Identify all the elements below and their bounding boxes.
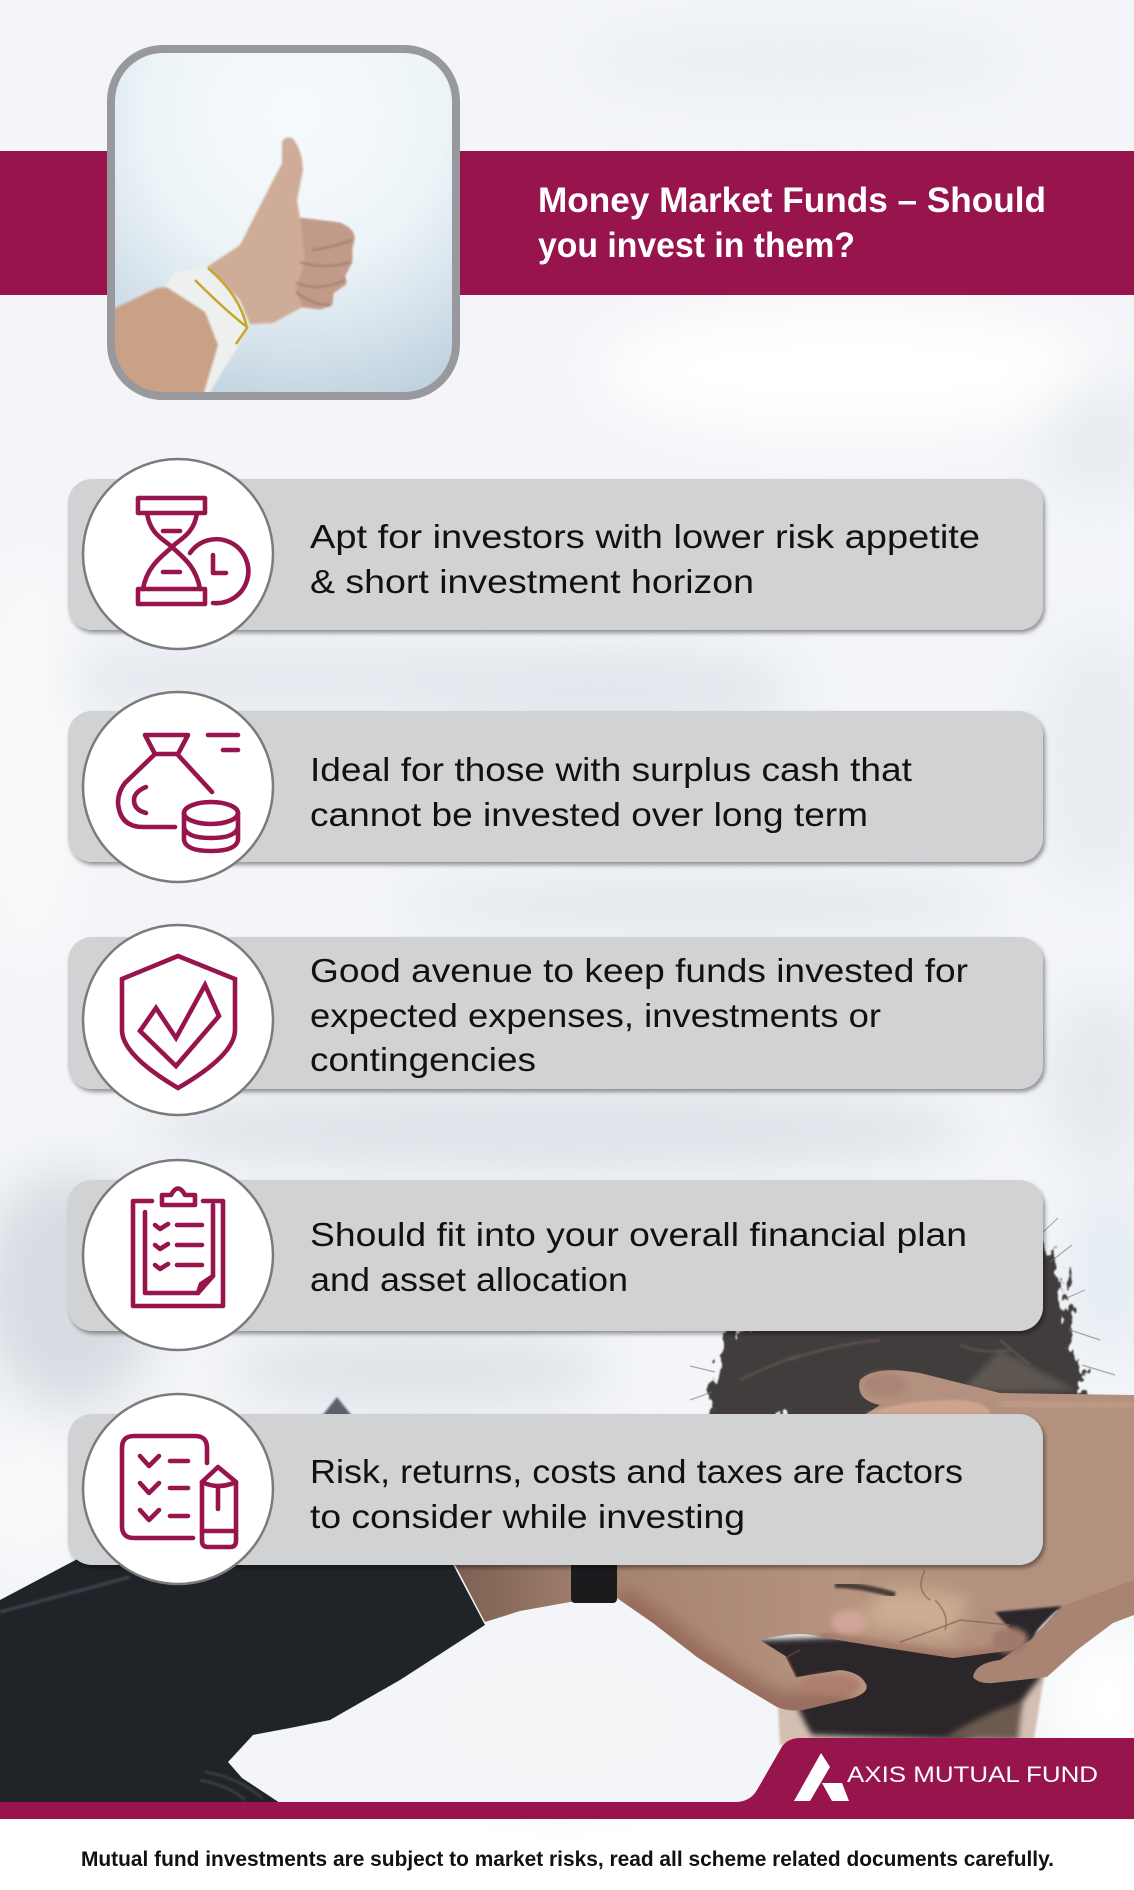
panel: item 5	[68, 1394, 1043, 1584]
hair lower	[755, 1630, 1040, 1740]
lower right fingers	[973, 1580, 1134, 1683]
footer band with logo tab	[0, 1738, 1134, 1819]
text: & short investment horizon	[310, 564, 754, 601]
text	[310, 752, 913, 834]
left forearm and hand	[450, 1555, 1045, 1711]
icon: clipboard checklist	[83, 1160, 273, 1350]
hand	[207, 138, 354, 324]
title	[538, 181, 1046, 265]
fingers	[296, 218, 354, 309]
text: cannot be invested over long term	[310, 797, 868, 834]
text	[310, 519, 980, 601]
bracelet strings	[195, 268, 248, 344]
text: Good avenue to keep funds invested for	[310, 953, 968, 990]
title band	[0, 151, 1134, 295]
photo: man with hands behind head	[0, 1218, 1134, 1803]
neck	[777, 1670, 1045, 1745]
title: you invest in them?	[538, 226, 855, 265]
logo wordmark: AXIS MUTUAL FUND	[847, 1762, 1098, 1787]
distant roof peak	[322, 1397, 352, 1416]
text	[310, 1454, 963, 1536]
icon: hourglass and clock	[83, 459, 273, 649]
watch strap	[571, 1560, 617, 1603]
hand details	[787, 1373, 1134, 1695]
photo: thumbs up in rounded frame	[105, 49, 456, 400]
hair between fingers	[995, 1606, 1062, 1640]
text: and asset allocation	[310, 1262, 628, 1299]
text: Ideal for those with surplus cash that	[310, 752, 913, 789]
text	[310, 1217, 967, 1299]
icon: money bag and coins	[83, 692, 273, 882]
text: Apt for investors with lower risk appetite	[310, 519, 980, 556]
title: Money Market Funds – Should	[538, 181, 1046, 220]
forearm	[115, 286, 219, 392]
text: to consider while investing	[310, 1499, 745, 1536]
panel: item 1	[68, 459, 1043, 649]
shirt	[0, 1555, 485, 1803]
hair upper	[690, 1218, 1115, 1422]
panel: item 4	[68, 1160, 1043, 1350]
text	[310, 953, 968, 1079]
right hand and arm	[859, 1370, 1134, 1615]
text: contingencies	[310, 1042, 536, 1079]
icon: checklist and pencil	[83, 1394, 273, 1584]
text: expected expenses, investments or	[310, 998, 881, 1035]
wristband	[165, 267, 249, 396]
panel: item 2	[68, 692, 1043, 882]
text: Should fit into your overall financial plan	[310, 1217, 967, 1254]
icon: Axis logo	[794, 1753, 849, 1801]
icon: shield with check	[83, 925, 273, 1115]
text: Risk, returns, costs and taxes are factors	[310, 1454, 963, 1491]
disclaimer: Mutual fund investments are subject to market risks, read all scheme related documents carefully.	[81, 1847, 1054, 1871]
panel: item 3	[68, 925, 1043, 1115]
